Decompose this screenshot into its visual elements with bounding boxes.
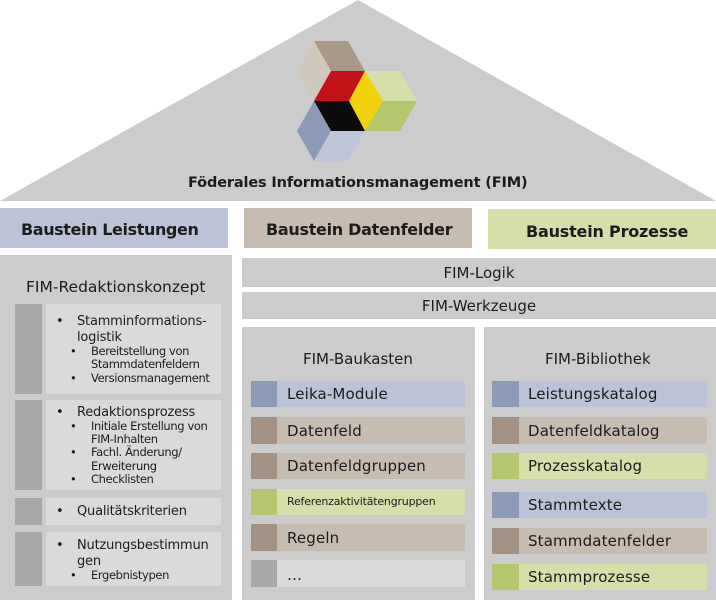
item: Nutzungsbestimmungen: Nutzungsbestimmun	[77, 538, 209, 553]
heading: Baustein Datenfelder	[244, 208, 472, 248]
item: Redaktionsprozess: Redaktionsprozess	[77, 405, 195, 420]
row: Stammprozesse	[492, 564, 707, 590]
item: Stamminformationslogistik: Versionsmanagement	[91, 371, 209, 385]
item: Stamminformationslogistik: Bereitstellung von	[91, 344, 189, 358]
item: Stamminformationslogistik: Stammdatenfeldern	[91, 357, 200, 371]
item: Redaktionsprozess: Checklisten	[91, 472, 153, 486]
title: Föderales Informationsmanagement (FIM)	[188, 175, 528, 191]
item: Nutzungsbestimmungen: •	[56, 538, 63, 553]
bar: FIM-Werkzeuge	[242, 292, 716, 319]
heading: Baustein Datenfelder: Baustein Datenfelder	[266, 220, 452, 239]
item: Nutzungsbestimmungen: Ergebnistypen	[91, 568, 169, 582]
row: Regeln	[251, 524, 465, 551]
item: Qualitätskriterien	[15, 498, 221, 525]
row: Prozesskatalog	[492, 453, 707, 479]
item: Stamminformationslogistik: •	[70, 371, 76, 385]
panel heading: FIM-Baukasten	[303, 350, 413, 368]
item: Stamminformationslogistik: •	[56, 314, 63, 329]
row: Datenfeldkatalog: Datenfeldkatalog	[528, 422, 660, 440]
icon: FIM cube logo	[297, 41, 417, 161]
panel heading: FIM-Redaktionskonzept	[26, 278, 205, 296]
row: Referenzaktivitätengruppen	[251, 489, 465, 515]
row: Leistungskatalog: Leistungskatalog	[528, 385, 658, 403]
row: Referenzaktivitätengruppen: Referenzaktivitätengruppen	[287, 495, 435, 508]
row: Regeln: Regeln	[287, 529, 339, 547]
panel: FIM-Redaktionskonzept	[0, 255, 232, 600]
row: Datenfeld: Datenfeld	[287, 422, 362, 440]
item: Redaktionsprozess: •	[70, 472, 76, 486]
heading: Baustein Leistungen	[0, 208, 228, 248]
item: Stamminformationslogistik: logistik	[77, 330, 122, 345]
item: Stamminformationslogistik: •	[70, 344, 76, 358]
house roof	[0, 0, 716, 201]
item: Nutzungsbestimmungen	[15, 532, 221, 586]
bar: FIM-Logik	[242, 258, 716, 287]
row: Stammtexte: Stammtexte	[528, 496, 622, 514]
row: ellipsis	[251, 560, 465, 587]
row: ellipsis: …	[287, 566, 302, 584]
row: Stammdatenfelder	[492, 528, 707, 554]
item: Stamminformationslogistik	[15, 304, 221, 394]
row: Datenfeldgruppen: Datenfeldgruppen	[287, 457, 426, 475]
heading: Baustein Leistungen: Baustein Leistungen	[21, 220, 198, 239]
item: Stamminformationslogistik: Stamminformations-	[77, 314, 207, 329]
item: Redaktionsprozess: Initiale Erstellung von	[91, 419, 207, 433]
bar: FIM-Werkzeuge: FIM-Werkzeuge	[422, 297, 536, 315]
bar: FIM-Logik: FIM-Logik	[443, 264, 515, 282]
item: Redaktionsprozess	[15, 400, 221, 490]
item: Qualitätskriterien: Qualitätskriterien	[77, 504, 187, 519]
row: Leika-Module	[251, 381, 465, 407]
row: Datenfeldgruppen	[251, 453, 465, 479]
row: Stammtexte	[492, 492, 707, 518]
row: Stammdatenfelder: Stammdatenfelder	[528, 532, 671, 550]
item: Redaktionsprozess: FIM-Inhalten	[91, 432, 158, 446]
item: Redaktionsprozess: Fachl. Änderung/	[91, 445, 182, 459]
row: Leistungskatalog	[492, 381, 707, 407]
item: Redaktionsprozess: Erweiterung	[91, 459, 157, 473]
item: Redaktionsprozess: •	[70, 445, 76, 459]
heading: Baustein Prozesse: Baustein Prozesse	[526, 222, 688, 241]
panel: FIM-Baukasten	[242, 327, 475, 600]
row: Datenfeldkatalog	[492, 417, 707, 444]
item: Redaktionsprozess: •	[56, 405, 63, 420]
row: Stammprozesse: Stammprozesse	[528, 568, 650, 586]
row: Datenfeld	[251, 417, 465, 444]
item: Redaktionsprozess: •	[70, 419, 76, 433]
item: Nutzungsbestimmungen: •	[70, 568, 76, 582]
item: Qualitätskriterien: •	[56, 504, 63, 519]
row: Leika-Module: Leika-Module	[287, 385, 388, 403]
row: Prozesskatalog: Prozesskatalog	[528, 457, 642, 475]
panel heading: FIM-Bibliothek	[545, 350, 651, 368]
panel: FIM-Bibliothek	[484, 327, 716, 600]
item: Nutzungsbestimmungen: gen	[77, 554, 101, 569]
heading: Baustein Prozesse	[488, 209, 716, 249]
